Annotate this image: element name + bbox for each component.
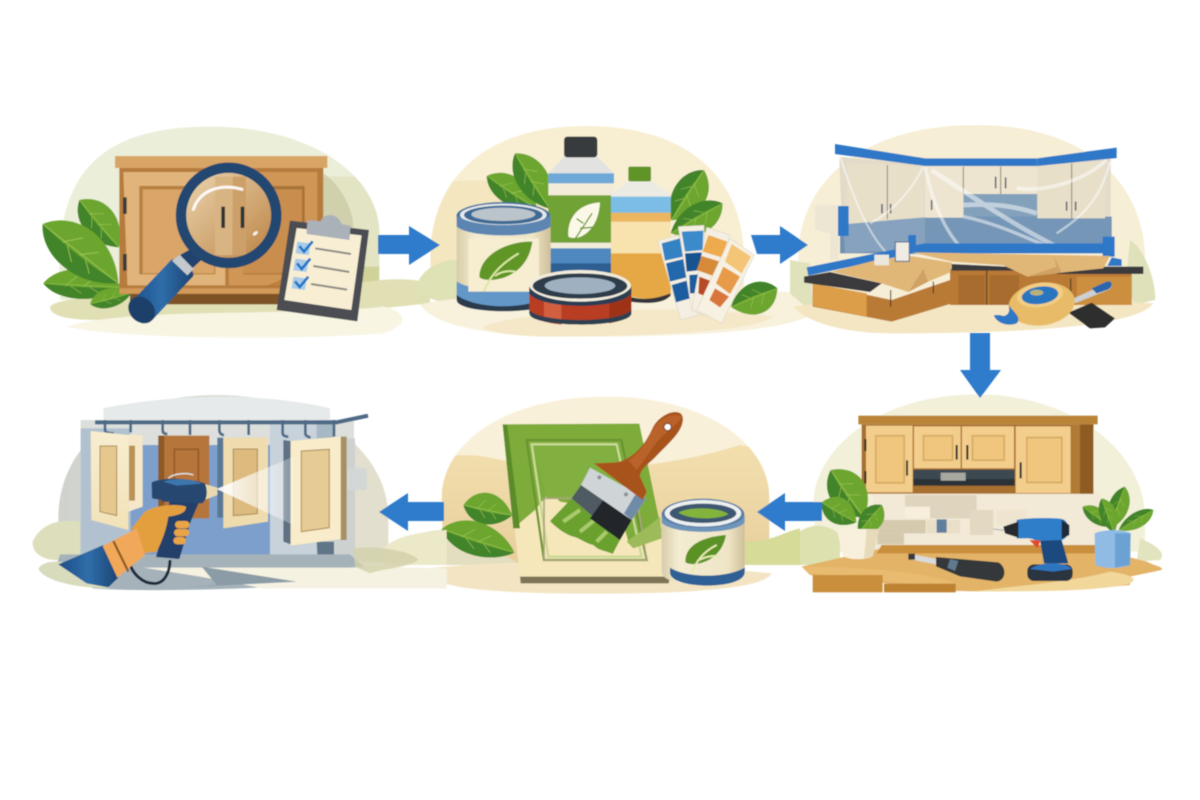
ground shadow [50, 279, 430, 320]
paint brush [550, 412, 683, 554]
green ground wash right [1137, 538, 1162, 562]
back wall [81, 420, 367, 567]
cabinet door half painted [503, 424, 670, 583]
sand dunes [437, 445, 773, 565]
arrow: step 1 to 2 [378, 226, 440, 265]
background blob [430, 126, 744, 300]
arrow: step 3 to 4 [960, 333, 1001, 398]
cordless drill [993, 518, 1073, 581]
floor with light beams [57, 554, 447, 590]
plant in white pot [816, 459, 891, 559]
orange bottle [611, 167, 671, 303]
spray gun [128, 474, 217, 583]
panel: spray cabinet doors [33, 395, 447, 590]
magnifying glass [123, 168, 276, 329]
ground shadow [38, 562, 110, 588]
colour swatch fan [658, 225, 754, 323]
ground wash [427, 562, 772, 594]
short red can [529, 270, 631, 325]
plastic haze [840, 157, 1112, 253]
green ground wash left [33, 521, 80, 562]
plastic sheeting [840, 157, 1110, 257]
upper cabinets [858, 416, 1098, 494]
panel: paint with green brush [417, 397, 800, 594]
arrow: step 5 to 6 [379, 493, 444, 531]
screwdriver [908, 554, 1004, 582]
hanging door 4 [283, 437, 347, 546]
ground highlight [67, 307, 402, 338]
leaves [30, 188, 134, 312]
green ground wash right [383, 530, 447, 565]
ceiling [103, 397, 330, 420]
plant in blue pot [1079, 484, 1158, 568]
hanging door 2 wood [158, 436, 209, 518]
green paint can [662, 499, 745, 586]
hanging door 1 [91, 431, 143, 530]
panel: prep and remove hardware [790, 394, 1162, 592]
side wall wash [815, 205, 838, 260]
back wall with backsplash [839, 157, 1112, 253]
ground shadow [483, 310, 773, 337]
background wash [328, 176, 380, 267]
background blob [813, 394, 1145, 552]
clipboard [277, 215, 369, 321]
leaves [480, 144, 784, 323]
small containers [874, 242, 909, 265]
paper fold shading [908, 255, 1062, 292]
panel: gather supplies [416, 126, 820, 337]
sleeve and gloved hand [58, 505, 190, 587]
background blob [798, 125, 1145, 300]
large paint can [456, 202, 551, 311]
background wash [430, 180, 549, 267]
hanging door 3 [217, 438, 268, 528]
ground wash [420, 292, 820, 337]
leaves [437, 488, 520, 567]
illustration group [30, 125, 1162, 594]
green ground wash [416, 260, 487, 307]
arrow: step 2 to 3 [751, 226, 808, 264]
arrow: step 4 to 5 [757, 493, 822, 531]
shadow band [417, 525, 520, 565]
counter top [802, 545, 1162, 592]
ground wash [793, 299, 1153, 333]
olive wash [362, 266, 380, 282]
checklist [292, 241, 351, 290]
panel: mask the kitchen [790, 125, 1155, 333]
tall bottle [548, 137, 614, 273]
tape roll [994, 278, 1115, 330]
cabinet [115, 156, 353, 304]
background blob [58, 395, 388, 562]
lower cabinets [813, 268, 1132, 322]
background blob [442, 397, 769, 565]
upper cabinets [847, 161, 1105, 224]
background blob [59, 127, 379, 300]
range hood [913, 470, 1015, 486]
green ground wash [790, 526, 840, 565]
green ground wash left [790, 260, 813, 313]
backsplash tiles [873, 492, 1100, 555]
blue masking tape [807, 144, 1122, 276]
green ground wash [745, 528, 800, 565]
dark countertop [804, 264, 1143, 292]
hanging rail and hooks [95, 416, 368, 437]
green ground wash [1127, 240, 1155, 305]
infographic: six-step cabinet painting process [32, 125, 1162, 594]
spray cone [217, 457, 293, 525]
brown paper covering [832, 252, 1110, 292]
panel: inspect cabinet [30, 127, 430, 338]
olive shadow right [353, 547, 418, 573]
